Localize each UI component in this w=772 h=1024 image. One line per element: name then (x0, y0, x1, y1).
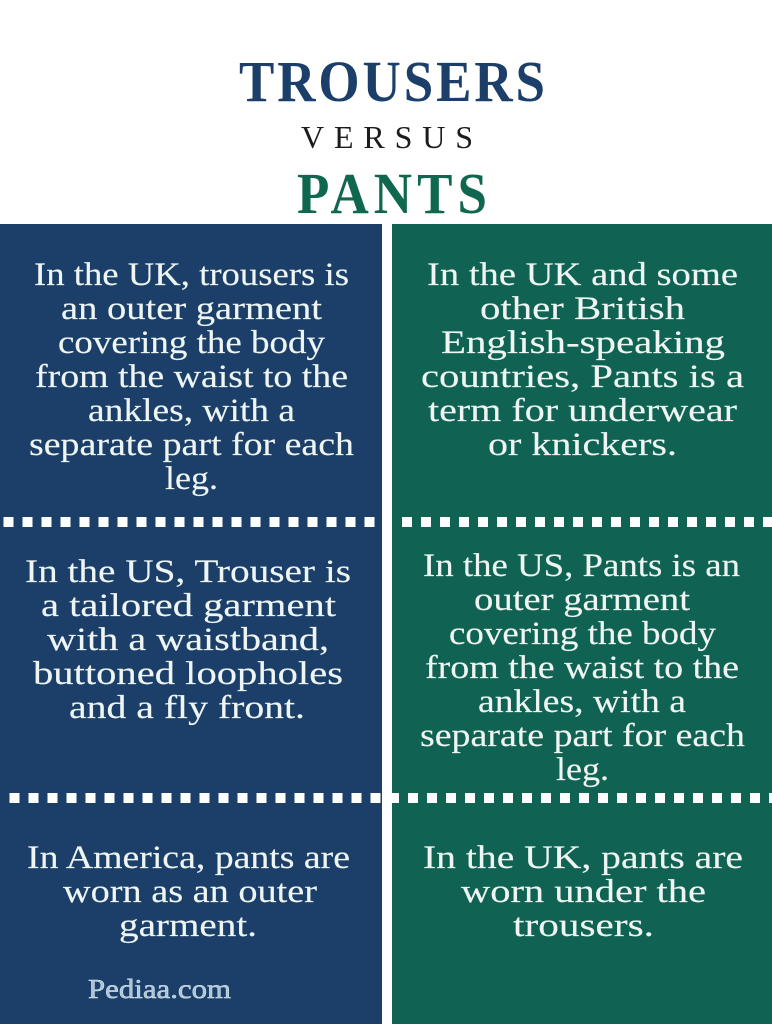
text: trousers US definition: a tailored garment (41, 588, 336, 624)
panel: trousers column (0, 224, 382, 1024)
text: trousers UK definition: separate part for each (29, 427, 355, 463)
text: pants UK definition: or knickers. (488, 427, 677, 463)
text: trousers UK definition: an outer garment (61, 291, 322, 327)
text: pants UK definition: In the UK and some (427, 257, 738, 293)
text: pants US definition (420, 548, 746, 788)
text: trousers usage in America: worn as an outer (63, 874, 317, 910)
text: trousers UK definition: ankles, with a (88, 393, 295, 429)
text: trousers US definition: buttoned loopholes (33, 656, 343, 692)
text: pants usage in UK: trousers. (513, 908, 654, 944)
text: pants UK definition: countries, Pants is a (421, 359, 744, 395)
text: trousers US definition: with a waistband, (47, 622, 329, 658)
text: pants US definition: covering the body (449, 616, 717, 652)
text: trousers UK definition: from the waist to the (35, 359, 348, 395)
text: pants UK definition (421, 257, 744, 463)
text: pants US definition: outer garment (474, 582, 690, 618)
text: pants US definition: leg. (556, 752, 609, 788)
text: pants US definition: ankles, with a (478, 684, 686, 720)
text: trousers UK definition (29, 257, 355, 497)
title: trousers: TROUSERS (239, 50, 545, 115)
text: pants UK definition: other British (480, 291, 686, 327)
text: trousers usage in America (27, 840, 350, 944)
text: pants usage in UK (423, 840, 743, 944)
divider: first dotted row (4, 517, 772, 527)
text: pants usage in UK: worn under the (461, 874, 706, 910)
text: trousers UK definition: In the UK, trousers is (34, 257, 349, 293)
subtitle: versus: VERSUS (301, 119, 473, 155)
text: trousers UK definition: covering the body (58, 325, 326, 361)
text: pants US definition: In the US, Pants is an (423, 548, 740, 584)
text: trousers US definition: In the US, Trouser is (25, 554, 351, 590)
text: pants usage in UK: In the UK, pants are (423, 840, 743, 876)
title: pants: PANTS (297, 162, 487, 227)
logo: Pediaa.com: Pediaa.com (88, 974, 231, 1004)
text: pants UK definition: English-speaking (441, 325, 725, 361)
panel: pants column (392, 224, 772, 1024)
text: trousers US definition: and a fly front. (69, 690, 305, 726)
text: trousers US definition (25, 554, 351, 726)
text: trousers usage in America: In America, pants are (27, 840, 350, 876)
text: trousers usage in America: garment. (119, 908, 257, 944)
text: pants US definition: separate part for each (420, 718, 746, 754)
divider: second dotted row (10, 793, 772, 803)
text: pants UK definition: term for underwear (428, 393, 737, 429)
text: pants US definition: from the waist to the (425, 650, 739, 686)
text: trousers UK definition: leg. (165, 461, 218, 497)
